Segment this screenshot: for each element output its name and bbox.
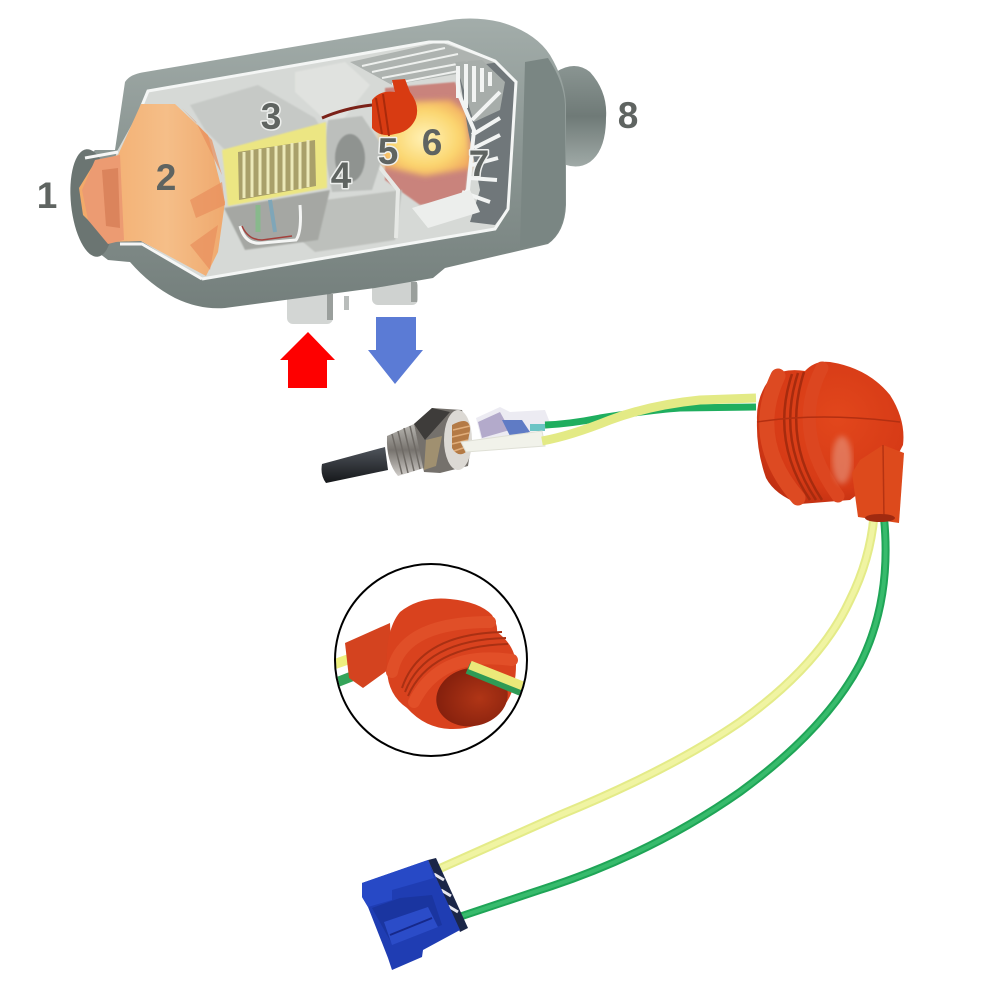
green wire long: [462, 518, 886, 916]
front flange: [809, 368, 838, 496]
boot sheen: [832, 436, 852, 484]
intake ring highlight: [85, 152, 202, 279]
white sleeve: [461, 431, 545, 452]
fan intake opening: [82, 155, 124, 244]
boot body: [757, 362, 903, 504]
interior details: [190, 42, 518, 252]
black rod: [322, 447, 388, 483]
green wire upper: [545, 407, 756, 425]
blue crimp terminal: [476, 407, 552, 442]
control unit cover: [190, 85, 325, 150]
inset ring: [335, 564, 527, 756]
connector top face: [362, 860, 434, 907]
fuel tube: [378, 165, 398, 238]
inset background: [335, 564, 527, 756]
outlet cylinder on the right: [556, 66, 606, 167]
red wire to boot: [322, 105, 372, 118]
number 2: 2: [156, 157, 176, 198]
connector recess: [372, 895, 442, 944]
blue arrow: down: [368, 317, 423, 384]
ribs: [402, 632, 508, 696]
number 3: 3: [261, 96, 281, 137]
wire through hole: [468, 668, 526, 692]
copper coil: [452, 421, 470, 454]
fan blades: [182, 108, 225, 270]
lower ports: [287, 280, 418, 324]
small red boot in the heater: [372, 79, 417, 136]
threaded section: [387, 424, 424, 476]
red silicone boot: [757, 362, 904, 523]
shell right panel shade: [520, 58, 565, 248]
red arrow: up: [280, 332, 335, 388]
inset circle close-up: [335, 564, 528, 756]
motor housing: [296, 190, 402, 252]
connector body: [362, 860, 460, 970]
connector side slots: [428, 858, 468, 932]
blue connector: [362, 858, 468, 970]
upper fuel duct: [296, 63, 368, 120]
wiring compartment: [224, 190, 330, 250]
number 6: 6: [422, 122, 442, 163]
hole: [436, 668, 508, 726]
number 7: 7: [469, 143, 489, 184]
yellow wire upper: [542, 398, 756, 441]
boot grooves: [784, 372, 822, 500]
back flange: [767, 376, 798, 498]
cutaway interior: [114, 42, 516, 279]
cutaway white edge: [141, 42, 516, 279]
stem: [345, 623, 392, 688]
white heat exchanger ribs: [456, 64, 502, 204]
flame: [378, 100, 472, 176]
number 1: 1: [37, 175, 57, 216]
heat exchanger fins: [458, 62, 518, 225]
number 5: 5: [378, 131, 398, 172]
yellow radiator panel: [222, 122, 327, 206]
yellow wire long: [432, 516, 874, 872]
orange fan: [79, 104, 225, 276]
boot stem: [852, 445, 904, 523]
number 4: 4: [331, 155, 352, 196]
stem hole: [865, 514, 895, 522]
number 8: 8: [618, 95, 638, 136]
glow plug: [322, 398, 756, 483]
air intake collar: [65, 147, 119, 259]
wires to connector: [432, 516, 886, 916]
burner chamber: [385, 82, 472, 205]
heater housing: [72, 18, 566, 308]
front flange: [414, 658, 512, 702]
left wires in inset: [335, 658, 352, 664]
wires: [240, 205, 300, 243]
back flange: [392, 622, 490, 672]
dome: [387, 599, 516, 729]
top fins: [350, 42, 495, 85]
parting line: [757, 417, 900, 422]
white collar: [444, 410, 472, 470]
hex nut: [414, 408, 472, 473]
lower chamber casing: [412, 190, 480, 228]
heater cutaway illustration: [37, 18, 638, 324]
impeller: [324, 116, 385, 192]
fin block top: [455, 60, 505, 122]
